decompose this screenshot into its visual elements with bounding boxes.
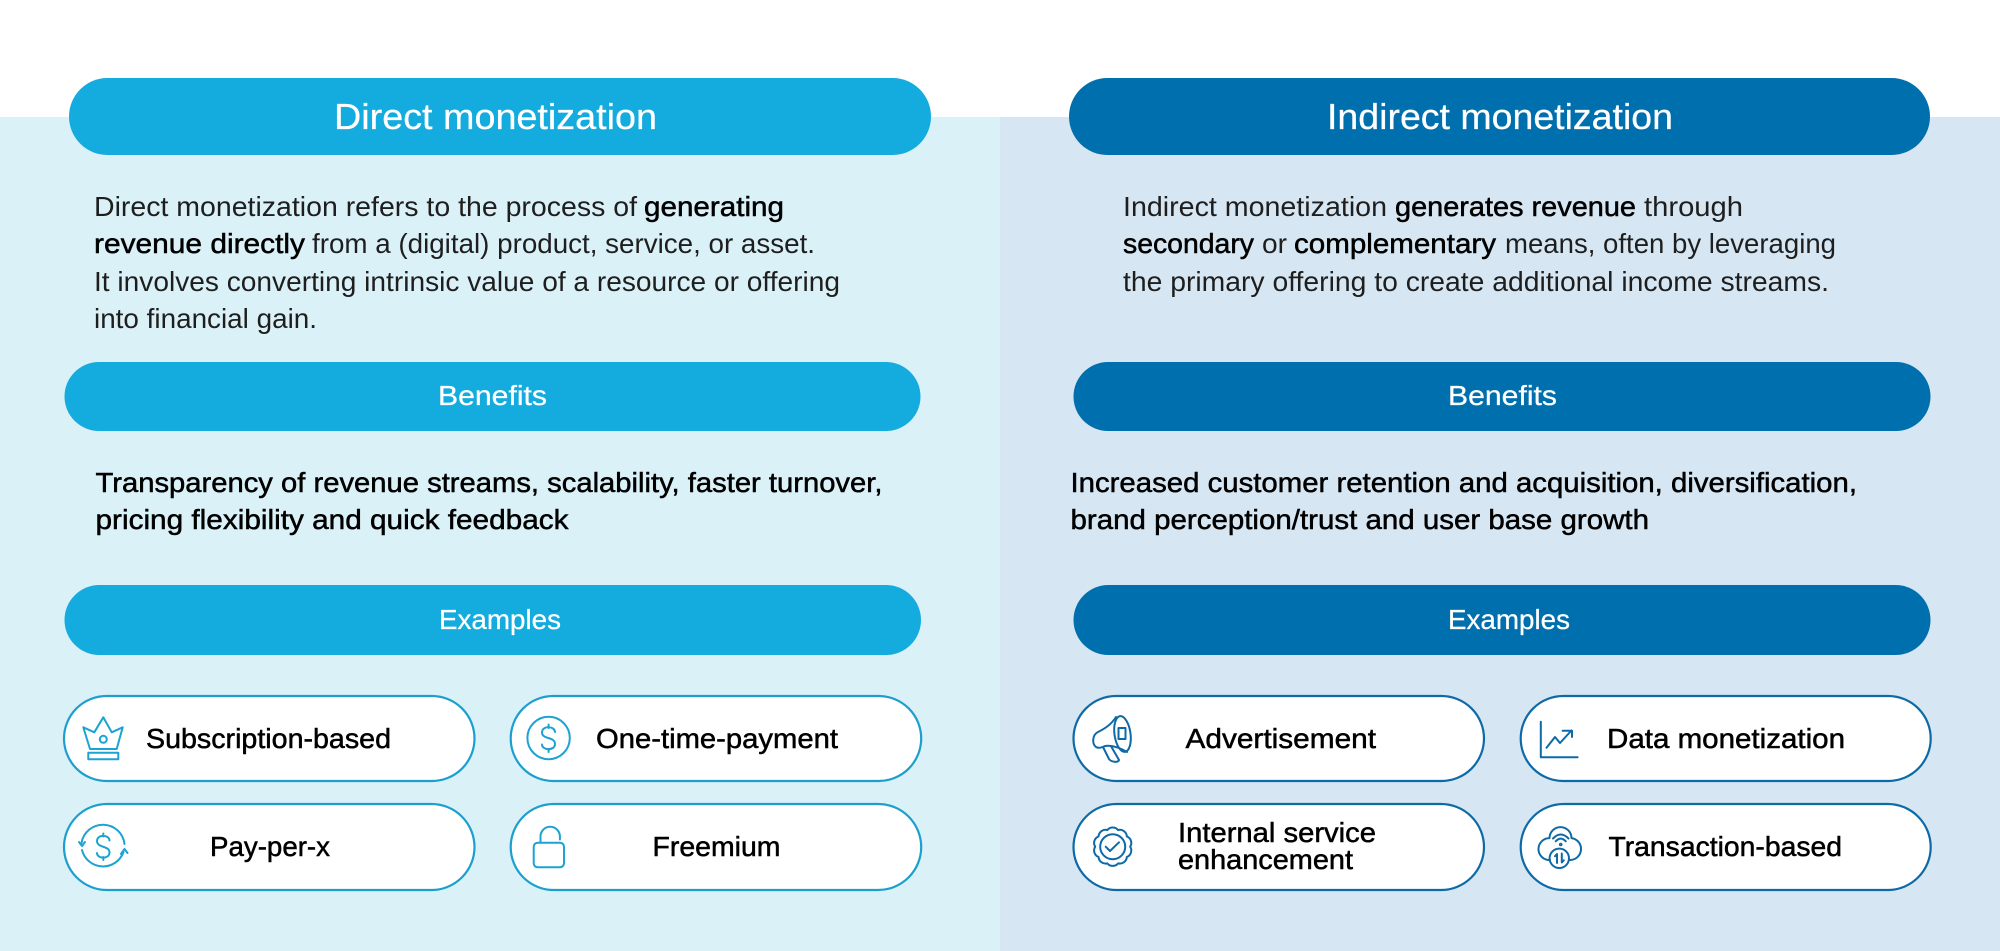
heading: direct monetization xyxy=(69,78,931,155)
text block: direct description: into financial gain. xyxy=(94,303,317,334)
chip: one-time-payment xyxy=(511,696,921,781)
subheading: direct examples xyxy=(64,585,921,655)
text block: direct description: Direct monetization refers to the process of xyxy=(94,191,637,222)
text block: indirect benefits xyxy=(1070,467,1857,535)
chip: pay-per-x xyxy=(64,804,474,890)
subheading: direct benefits: Benefits xyxy=(438,380,547,411)
subheading: indirect benefits xyxy=(1074,362,1930,431)
text block: indirect description: generates revenue xyxy=(1395,191,1636,222)
chip: internal service enhancement: Internal service xyxy=(1178,817,1376,848)
chip: freemium xyxy=(511,804,921,890)
text block: direct benefits xyxy=(96,467,882,535)
icon: quality badge xyxy=(1089,823,1137,870)
text block: indirect description: through xyxy=(1644,191,1743,222)
text block: direct description: It involves converting intrinsic value of a resource or offering xyxy=(94,266,840,297)
chip: one-time-payment: One-time-payment xyxy=(596,723,838,754)
text block: indirect description: secondary xyxy=(1123,228,1254,259)
text block: indirect description xyxy=(1123,191,1836,297)
text block: indirect benefits: Increased customer retention and acquisition, diversification, xyxy=(1070,467,1857,498)
chip: transaction-based: Transaction-based xyxy=(1608,831,1842,862)
chip: subscription-based: Subscription-based xyxy=(146,723,391,754)
chip: transaction-based xyxy=(1521,804,1931,890)
chip: subscription-based xyxy=(64,696,474,781)
icon: growth chart xyxy=(1541,722,1578,757)
icon: open padlock xyxy=(534,827,564,867)
chip: advertisement: Advertisement xyxy=(1186,723,1376,754)
subheading: direct benefits xyxy=(64,362,920,431)
text block: direct benefits: Transparency of revenue streams, scalability, faster turnover, xyxy=(96,467,882,498)
text block: indirect benefits: brand perception/trust and user base growth xyxy=(1070,504,1649,535)
icon: dollar coin xyxy=(527,717,570,759)
text block: indirect description: the primary offering to create additional income streams. xyxy=(1123,266,1829,297)
chip: internal service enhancement: enhancement xyxy=(1178,844,1353,875)
icon: megaphone xyxy=(1093,715,1133,762)
icon: crown xyxy=(83,717,123,759)
subheading: indirect examples: Examples xyxy=(1448,604,1570,635)
subheading: indirect benefits: Benefits xyxy=(1448,380,1557,411)
chip: advertisement xyxy=(1074,696,1484,781)
subheading: indirect examples xyxy=(1074,585,1930,655)
text block: indirect description: means, often by leveraging xyxy=(1505,228,1836,259)
panel background: direct xyxy=(0,117,1000,951)
chip: internal service enhancement xyxy=(1074,804,1484,890)
panel background: indirect xyxy=(1000,117,2000,951)
text block: indirect description: complementary xyxy=(1294,228,1496,259)
panel: direct monetization xyxy=(0,78,1000,951)
text block: direct description: revenue directly xyxy=(94,228,305,259)
icon: cloud with wifi xyxy=(1538,827,1581,868)
heading: direct monetization: Direct monetization xyxy=(334,96,657,137)
text block: indirect description: or xyxy=(1262,228,1287,259)
chip: data monetization: Data monetization xyxy=(1607,723,1845,754)
icon: recurring dollar xyxy=(79,825,128,866)
subheading: direct examples: Examples xyxy=(439,604,561,635)
chip: data monetization xyxy=(1521,696,1931,781)
text block: indirect description: Indirect monetization xyxy=(1123,191,1387,222)
chip: pay-per-x: Pay-per-x xyxy=(210,831,330,862)
text block: direct benefits: pricing flexibility and quick feedback xyxy=(96,504,570,535)
panel: indirect monetization xyxy=(1000,78,2000,951)
chip: freemium: Freemium xyxy=(652,831,780,862)
text block: direct description xyxy=(94,191,840,334)
heading: indirect monetization xyxy=(1069,78,1930,155)
text block: direct description: from a (digital) product, service, or asset. xyxy=(312,228,815,259)
heading: indirect monetization: Indirect monetization xyxy=(1327,96,1673,137)
text block: direct description: generating xyxy=(644,191,784,222)
